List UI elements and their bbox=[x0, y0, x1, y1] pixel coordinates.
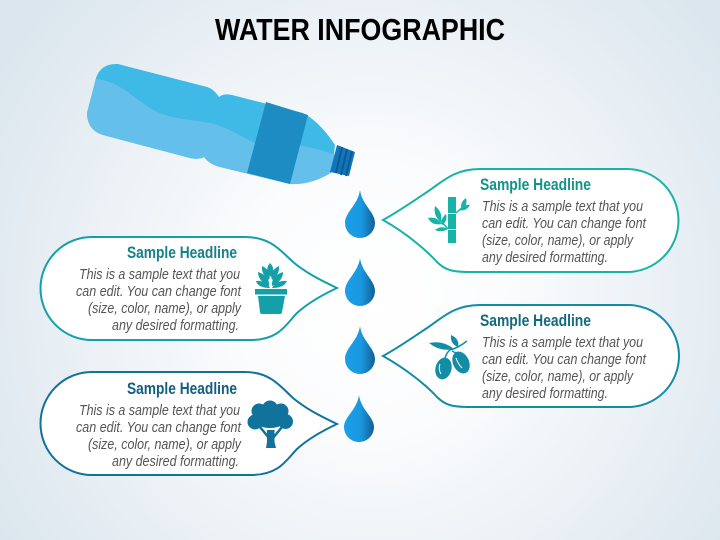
panel: lower right callout: Sample Headline bbox=[480, 312, 591, 330]
panel: middle left callout: Sample Headline bbox=[127, 244, 237, 262]
water drop 4 bbox=[344, 395, 374, 442]
panel: middle left callout: This is a sample text that you bbox=[79, 266, 241, 283]
panel: lower right callout: This is a sample text that you bbox=[482, 334, 644, 351]
panel: middle left callout bbox=[41, 237, 337, 340]
icon: water bottle bbox=[87, 64, 355, 184]
title: WATER INFOGRAPHIC bbox=[215, 12, 505, 47]
panel: middle left callout: (size, color, name), or apply bbox=[88, 300, 242, 317]
panel: top right callout: Sample Headline bbox=[480, 176, 591, 194]
icon: potted plant bbox=[255, 263, 287, 314]
water drop 3 bbox=[345, 326, 375, 374]
icon: olive branch bbox=[429, 335, 473, 381]
panel: lower right callout bbox=[383, 305, 679, 407]
panel: lower right callout: (size, color, name), or apply bbox=[482, 368, 634, 385]
water drop 2 bbox=[345, 258, 375, 306]
panel: bottom left callout: any desired formatting. bbox=[112, 453, 239, 470]
panel: bottom left callout: can edit. You can change font bbox=[76, 419, 242, 436]
water drop 1 bbox=[345, 190, 375, 238]
panel: top right callout: This is a sample text that you bbox=[482, 198, 644, 215]
panel: top right callout: (size, color, name), or apply bbox=[482, 232, 634, 249]
panel: top right callout bbox=[383, 169, 678, 272]
panel: top right callout: can edit. You can change font bbox=[482, 215, 647, 232]
panel: top right callout: any desired formatting. bbox=[482, 249, 608, 266]
panel: lower right callout: can edit. You can change font bbox=[482, 351, 647, 368]
panel: bottom left callout: Sample Headline bbox=[127, 380, 237, 398]
panel: lower right callout: any desired formatting. bbox=[482, 385, 608, 402]
icon: tree bbox=[248, 400, 293, 448]
panel: bottom left callout: (size, color, name), or apply bbox=[88, 436, 242, 453]
panel: middle left callout: can edit. You can change font bbox=[76, 283, 242, 300]
panel: bottom left callout: This is a sample text that you bbox=[79, 402, 241, 419]
icon: bamboo bbox=[428, 197, 470, 243]
panel: bottom left callout bbox=[41, 372, 337, 475]
panel: middle left callout: any desired formatting. bbox=[112, 317, 239, 334]
